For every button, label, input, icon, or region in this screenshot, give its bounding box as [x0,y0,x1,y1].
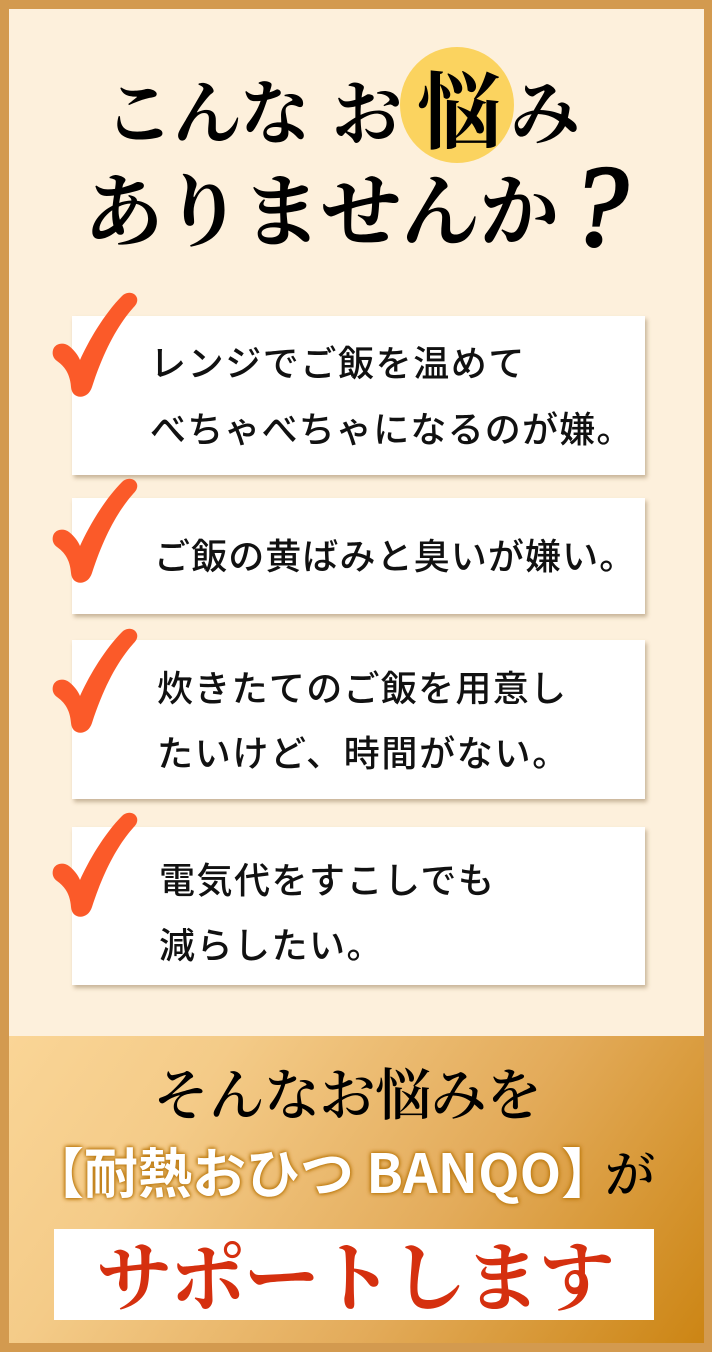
card 2 text: ご飯の黄ばみと臭いが嫌い。 [154,536,636,577]
banner text: サポートします [96,1218,613,1327]
card 1 [72,316,645,475]
title: 悩 [417,46,501,167]
card 4: 減らしたい。 [159,925,384,966]
title: こんな [104,58,308,159]
title [84,46,629,271]
icon: check mark 3 [52,628,138,733]
card 4 text: 電気代をすこしでも [159,860,495,901]
panel: gold gradient footer [9,1036,704,1343]
card 3 text: 炊きたてのご飯を用意し [157,668,567,709]
icon: check mark 1 [52,292,138,397]
highlight circle behind 悩 [400,47,514,163]
card 1 text: レンジでご飯を温めて [150,343,526,384]
title: ありませんか [84,148,558,263]
footer product name: 【耐熱おひつ BANQO】 [30,1130,615,1209]
footer product name: が [605,1135,655,1207]
card 3: たいけど、時間がない。 [157,733,570,774]
card 3 [72,640,645,799]
card 2 [72,498,645,614]
icon: check mark 4 [52,812,138,917]
panel: cream background [9,9,704,1036]
icon: check mark 2 [52,478,138,583]
footer heading: そんなお悩みを: そんなお悩みを [153,1052,542,1132]
title: み [510,58,580,159]
footer white banner [54,1229,654,1320]
card 1: べちゃべちゃになるのが嫌。 [150,409,634,450]
title: ? [570,143,628,271]
card 4 [72,827,645,985]
title: お [332,58,402,159]
